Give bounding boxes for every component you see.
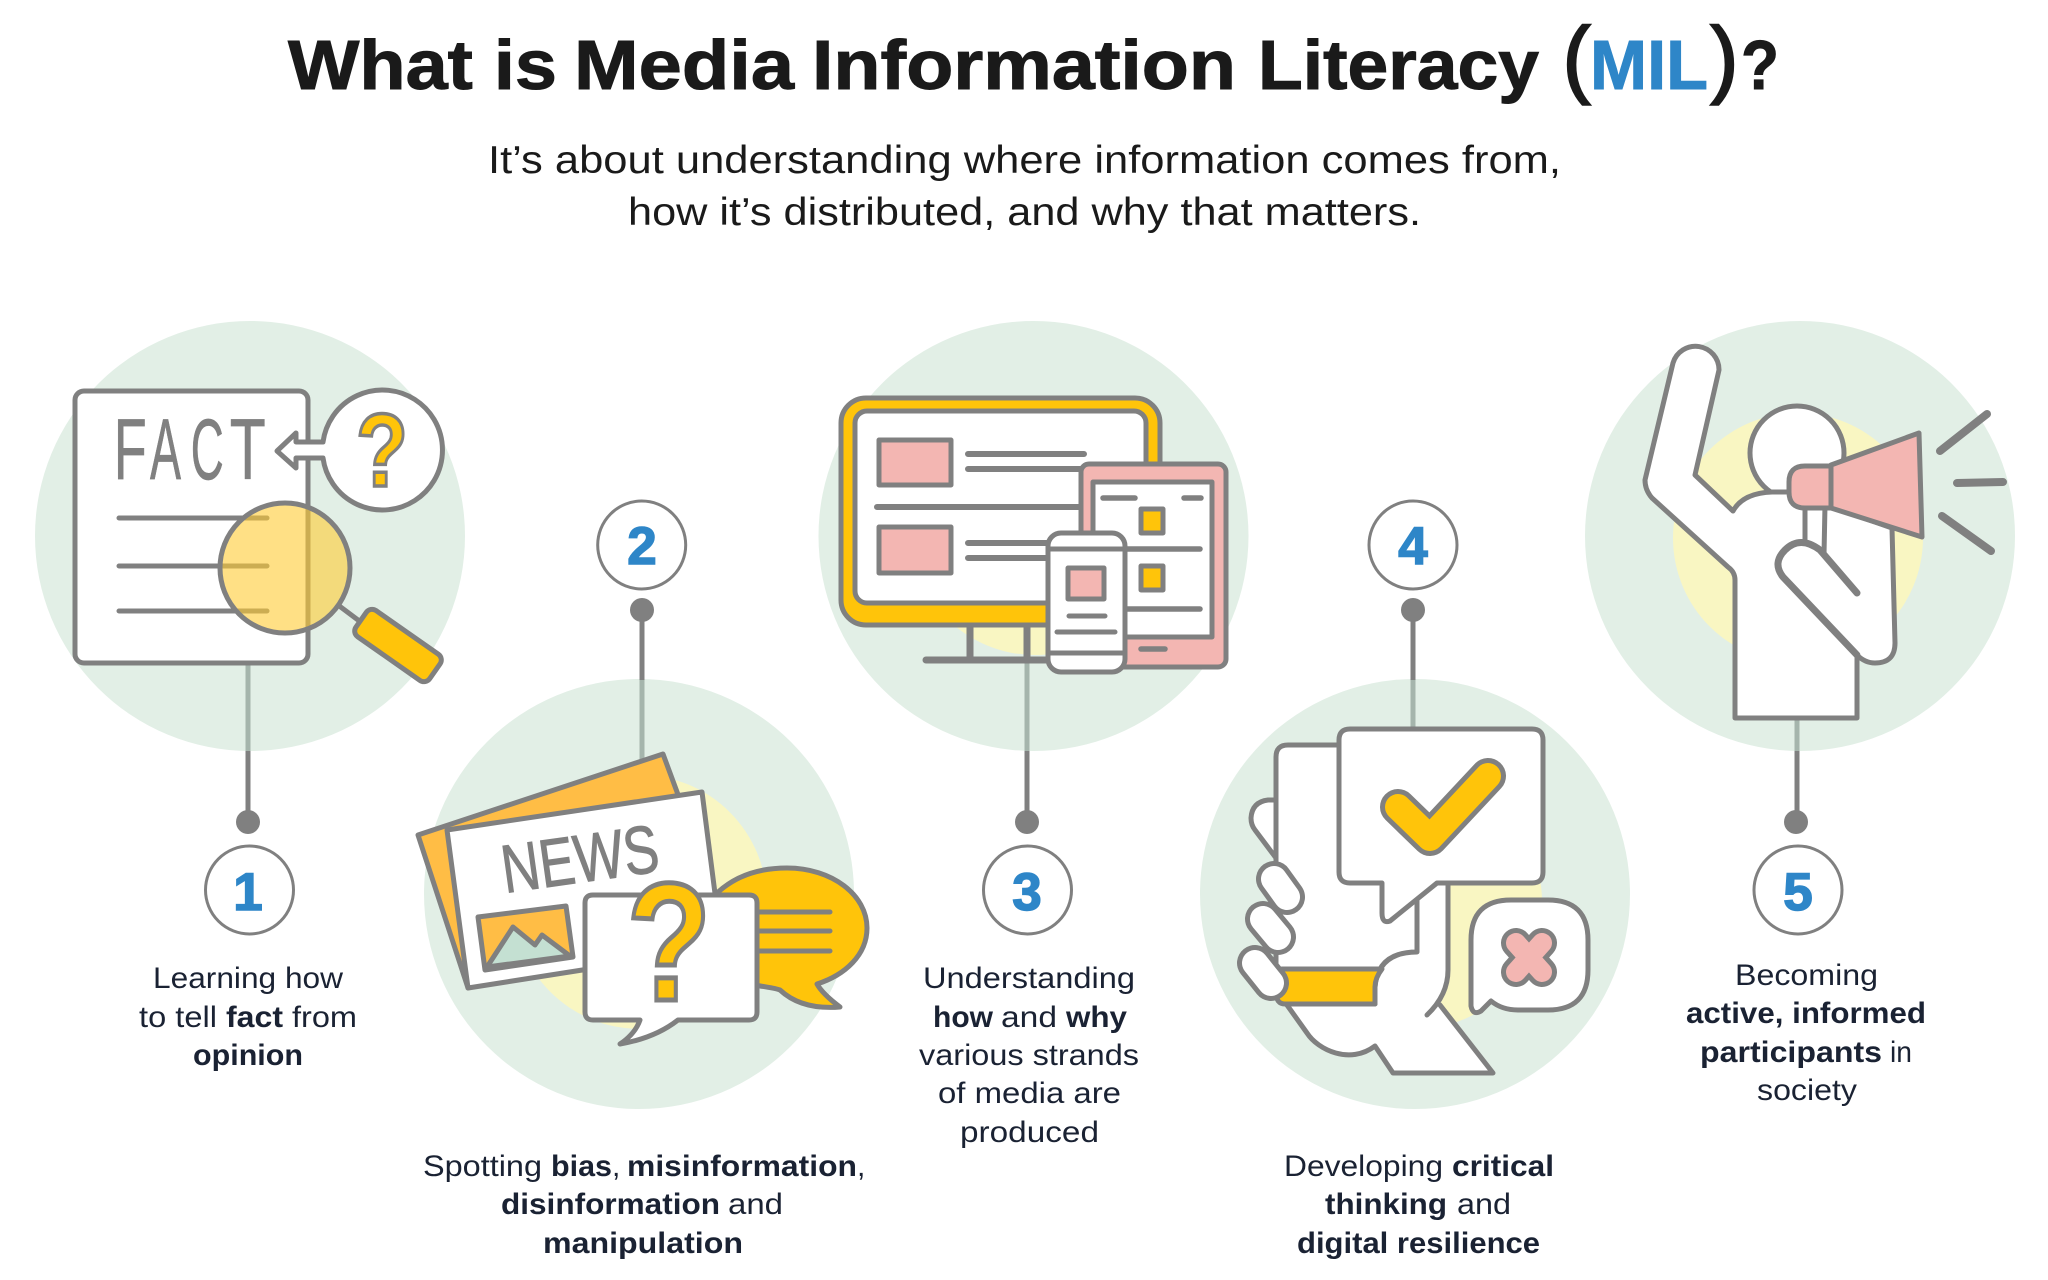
icon: fact document with magnifier: C bbox=[191, 402, 224, 498]
title: ) bbox=[1711, 11, 1738, 106]
caption 1: Learning how bbox=[153, 962, 343, 995]
caption 4: critical bbox=[1452, 1150, 1554, 1183]
background circle 3 bbox=[818, 321, 1248, 751]
caption 2: , bbox=[857, 1150, 865, 1183]
number badge 5: 5 bbox=[1783, 863, 1813, 922]
caption 4 bbox=[1284, 1150, 1554, 1260]
caption 5: active, informed bbox=[1686, 997, 1926, 1030]
connector line 1 bbox=[236, 663, 260, 834]
background circle 2 bbox=[424, 679, 854, 1109]
title: Media bbox=[574, 26, 795, 104]
caption 3: how bbox=[933, 1001, 994, 1034]
number badge 3 bbox=[984, 846, 1072, 934]
caption 3: and bbox=[1001, 1001, 1057, 1034]
title: Literacy bbox=[1258, 26, 1539, 104]
icon: newspaper and speech bubbles: ? bbox=[627, 848, 711, 1036]
caption 5: society bbox=[1757, 1074, 1857, 1107]
number badge 1: 1 bbox=[233, 863, 263, 922]
title: MIL bbox=[1590, 26, 1708, 104]
caption 5: in bbox=[1890, 1036, 1912, 1069]
number badge 5 bbox=[1754, 846, 1842, 934]
caption 4: Developing bbox=[1284, 1150, 1443, 1183]
icon: fact document with magnifier: F bbox=[114, 402, 147, 498]
background circle 1 bbox=[35, 321, 465, 751]
icon: fact document with magnifier: A bbox=[150, 402, 181, 498]
caption 1: to tell bbox=[139, 1001, 217, 1034]
caption 4: and bbox=[1457, 1188, 1511, 1221]
icon: hand holding phone with check and cross bubbles bbox=[1251, 729, 1588, 1073]
icon: fact document with magnifier: T bbox=[230, 402, 266, 498]
caption 4: thinking bbox=[1325, 1188, 1447, 1221]
icon: fact document with magnifier bbox=[75, 390, 444, 684]
icon: newspaper and speech bubbles bbox=[418, 754, 867, 1044]
caption 3: why bbox=[1065, 1001, 1127, 1034]
caption 3: produced bbox=[960, 1116, 1099, 1149]
panel: step 3 how and why media are produced bbox=[818, 321, 1248, 1149]
number badge 4: 4 bbox=[1398, 517, 1428, 576]
subtitle: how it’s distributed, and why that matters. bbox=[628, 191, 1421, 234]
icon: newspaper and speech bubbles: NEWS bbox=[497, 811, 664, 908]
caption 4: digital resilience bbox=[1297, 1227, 1540, 1260]
caption 2: , bbox=[612, 1150, 620, 1183]
caption 1 bbox=[139, 962, 357, 1072]
panel: step 5 active participants bbox=[1585, 321, 2015, 1107]
caption 1: opinion bbox=[193, 1039, 303, 1072]
title bbox=[288, 11, 1779, 106]
caption 3 bbox=[919, 962, 1139, 1149]
title: ? bbox=[1741, 26, 1779, 104]
caption 2: disinformation bbox=[501, 1188, 720, 1221]
caption 2: and bbox=[728, 1188, 783, 1221]
panel: step 2 spotting bias bbox=[418, 501, 867, 1260]
number badge 4 bbox=[1369, 501, 1457, 589]
subtitle: It’s about understanding where information comes from, bbox=[488, 139, 1561, 182]
title: What is bbox=[288, 26, 557, 104]
caption 1: from bbox=[292, 1001, 357, 1034]
caption 3: various strands bbox=[919, 1039, 1139, 1072]
caption 2 bbox=[423, 1150, 865, 1260]
caption 1: fact bbox=[226, 1001, 283, 1034]
subtitle bbox=[488, 139, 1561, 234]
connector line 4 bbox=[1401, 598, 1425, 730]
background circle 4 bbox=[1200, 679, 1630, 1109]
title: ( bbox=[1563, 11, 1590, 106]
icon: monitor, tablet and phone bbox=[841, 398, 1226, 672]
caption 5: participants bbox=[1700, 1036, 1882, 1069]
icon: person with megaphone bbox=[1645, 346, 2003, 718]
connector line 2 bbox=[630, 598, 654, 760]
caption 2: manipulation bbox=[543, 1227, 743, 1260]
number badge 3: 3 bbox=[1012, 863, 1042, 922]
caption 2: misinformation bbox=[627, 1150, 857, 1183]
number badge 2: 2 bbox=[627, 517, 657, 576]
connector line 3 bbox=[1015, 660, 1039, 834]
background circle 5 bbox=[1585, 321, 2015, 751]
icon: fact document with magnifier: ? bbox=[356, 393, 408, 509]
panel: step 1 fact from opinion bbox=[35, 321, 465, 1072]
caption 3: Understanding bbox=[923, 962, 1135, 995]
number badge 2 bbox=[598, 501, 686, 589]
panel: step 4 critical thinking bbox=[1200, 501, 1630, 1260]
caption 2: bias bbox=[551, 1150, 612, 1183]
caption 2: Spotting bbox=[423, 1150, 542, 1183]
caption 3: of media are bbox=[938, 1077, 1121, 1110]
title: Information bbox=[812, 26, 1236, 104]
caption 5 bbox=[1686, 959, 1926, 1107]
caption 5: Becoming bbox=[1735, 959, 1878, 992]
number badge 1 bbox=[206, 846, 294, 934]
connector line 5 bbox=[1784, 718, 1808, 834]
